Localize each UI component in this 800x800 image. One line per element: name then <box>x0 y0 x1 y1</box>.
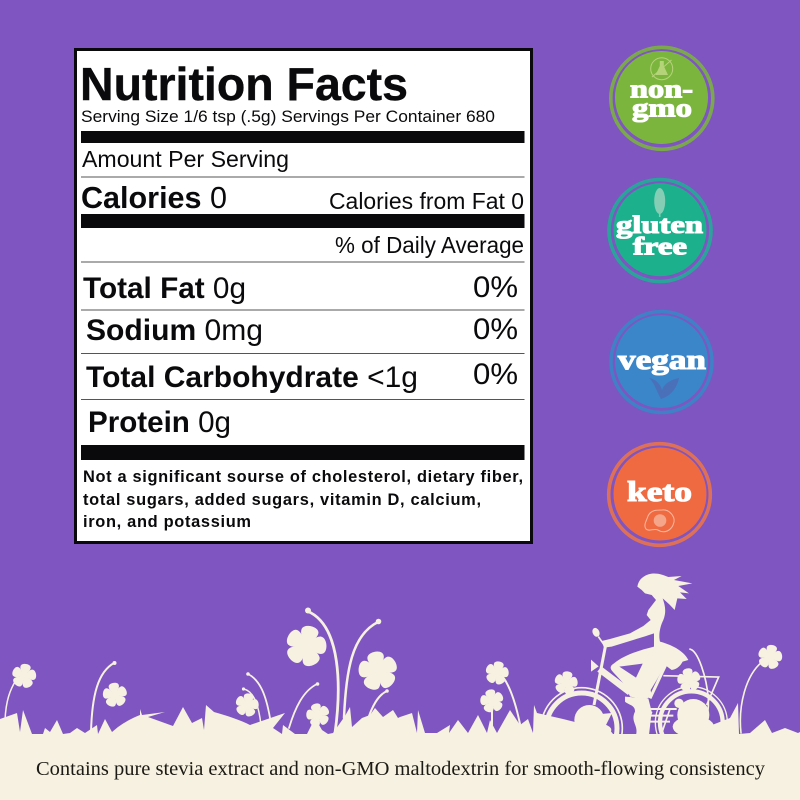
serving size line: Serving Size 1/6 tsp (.5g) Servings Per Container 680 <box>81 108 495 126</box>
badge: non-gmo: gmo <box>632 92 692 122</box>
stems <box>5 611 762 733</box>
percent daily average heading: % of Daily Average <box>335 232 524 258</box>
illustration: girl riding a bicycle <box>541 574 727 769</box>
row: total fat: Total Fat 0g <box>83 272 246 305</box>
calories from fat: Calories from Fat 0 <box>329 188 524 214</box>
icon: leaf <box>649 378 679 399</box>
amount per serving: Amount Per Serving <box>82 146 289 172</box>
badge: keto <box>609 444 710 545</box>
badge: vegan <box>611 312 712 412</box>
caption: Contains pure stevia extract and non-GMO maltodextrin for smooth-flowing consistency <box>36 758 766 780</box>
rider <box>602 574 692 699</box>
panel: nutrition facts label <box>76 50 532 542</box>
value: sodium percent: 0% <box>473 313 518 346</box>
badge: gluten free <box>609 180 711 282</box>
footnote: Not a significant sourse of cholesterol, dietary fiber, <box>83 468 523 486</box>
badge: non-gmo: non- <box>630 74 693 104</box>
icon: crossed-out flask <box>651 58 673 80</box>
grass <box>0 703 800 800</box>
flowers <box>9 662 39 691</box>
footnote: iron, and potassium <box>83 513 251 531</box>
badge: non-gmo <box>611 47 713 149</box>
footnote <box>83 468 523 531</box>
footnote: total sugars, added sugars, vitamin D, calcium, <box>83 491 481 509</box>
row: total carbohydrate: Total Carbohydrate <1g <box>86 361 418 394</box>
calories: Calories 0 <box>81 181 227 215</box>
illustration: meadow silhouette with flowers <box>0 608 800 800</box>
row: sodium: Sodium 0mg <box>86 314 263 347</box>
icon: wheat <box>654 188 665 217</box>
badge: keto: keto <box>627 476 692 508</box>
heading: Nutrition Facts: Nutrition Facts <box>80 58 408 110</box>
badge: gluten free: free <box>633 234 687 260</box>
icon: fried egg <box>645 510 674 532</box>
value: carbohydrate percent: 0% <box>473 358 518 391</box>
bicycle <box>541 627 727 769</box>
value: total fat percent: 0% <box>473 271 518 304</box>
badge: vegan: vegan <box>618 345 707 376</box>
badge: gluten free: gluten <box>616 212 703 239</box>
row: protein: Protein 0g <box>88 406 231 439</box>
